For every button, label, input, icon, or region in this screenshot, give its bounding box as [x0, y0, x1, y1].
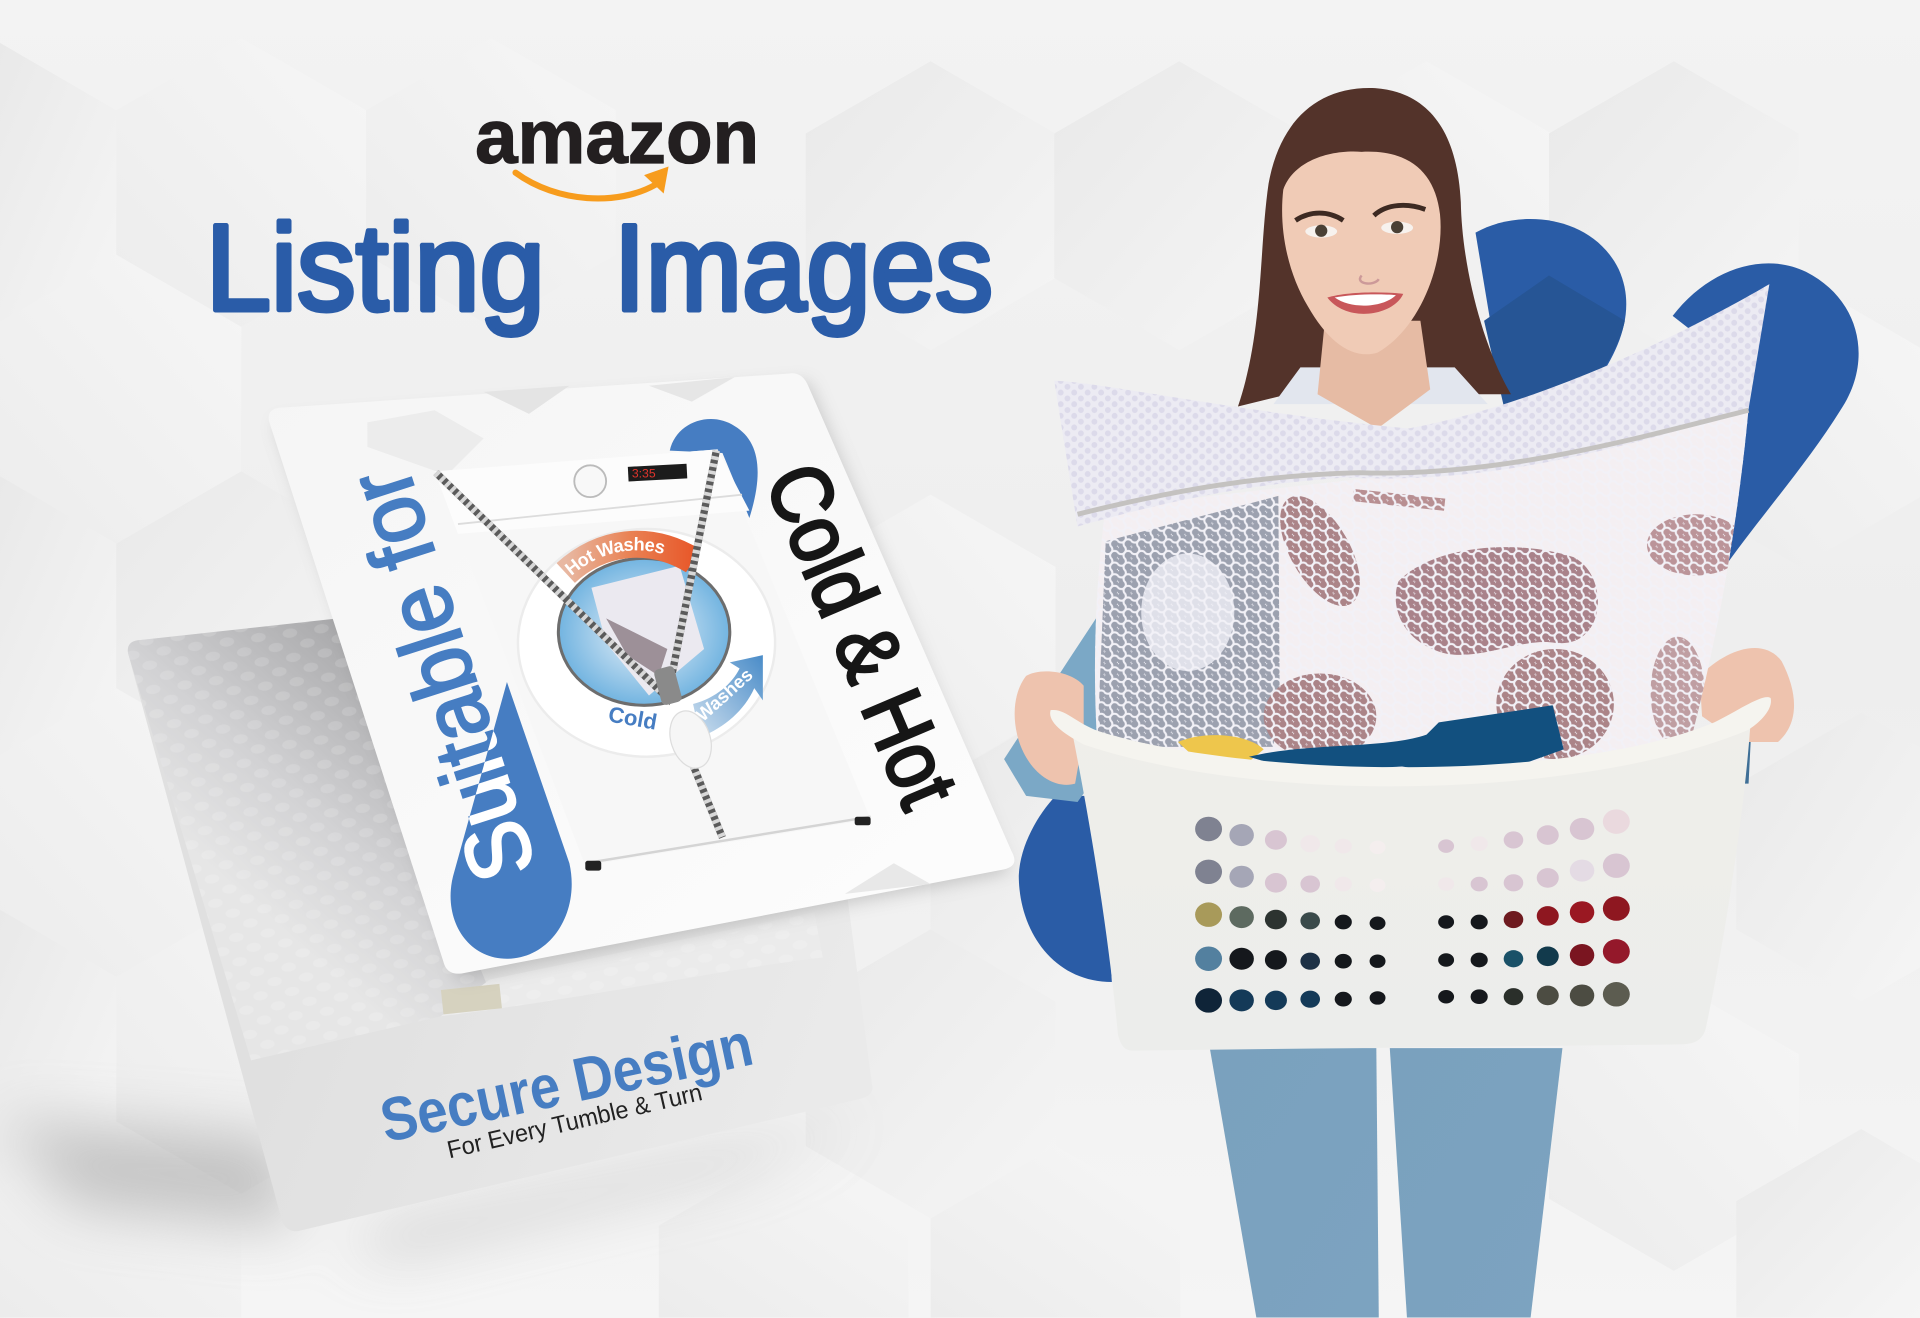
laundry basket	[1050, 697, 1771, 1051]
face	[1282, 152, 1441, 354]
woman figure	[1004, 88, 1794, 1318]
hair	[1238, 88, 1511, 407]
subheading: For Every Tumble & Turn	[445, 1079, 705, 1164]
title: Listing Images: Listing	[206, 199, 545, 336]
amazon logo: amazon	[475, 95, 759, 180]
Suitable for heading	[360, 476, 532, 878]
laundry bag in drum	[591, 566, 704, 695]
basket rim	[1050, 697, 1771, 786]
basket holes lower rows	[1195, 896, 1630, 1013]
sleeves and torso	[1004, 600, 1751, 802]
washes arrow: Washes	[691, 664, 757, 725]
cold label: Cold	[606, 702, 659, 735]
laundry in basket	[1178, 705, 1564, 779]
Suitable for heading: Suitable for	[329, 457, 555, 893]
Cold and Hot heading: Cold & Hot	[747, 450, 977, 821]
smile	[1327, 292, 1403, 314]
door ring	[518, 529, 775, 757]
jeans	[1210, 1048, 1562, 1318]
Secure Design heading: Secure Design	[374, 1010, 759, 1155]
zipper	[436, 451, 722, 838]
front card shadow	[276, 382, 1010, 980]
Suitable for heading: Suitable for	[329, 457, 555, 893]
bag zipper	[1078, 410, 1749, 514]
washing machine	[433, 449, 871, 871]
back card: secure design	[128, 575, 872, 1231]
basket holes upper rows	[1195, 809, 1630, 893]
mesh fabric panel	[128, 618, 823, 1060]
neck and shirt	[1273, 321, 1488, 429]
laundry mesh bag	[1054, 284, 1769, 771]
title: Listing Images: Images	[613, 199, 993, 336]
blue drop top right	[670, 419, 758, 518]
feet	[585, 861, 601, 871]
hot washes arc: Hot Washes	[564, 537, 664, 576]
yellow cloth	[1178, 735, 1264, 762]
clothes seen through mesh	[1097, 483, 1745, 759]
washing machine: 3:35	[632, 467, 656, 481]
hot washes arc	[556, 530, 694, 583]
blue background blobs	[1019, 219, 1859, 982]
title: Listing Images	[206, 199, 993, 336]
blue drop bottom left	[451, 682, 572, 959]
zipper tag	[441, 984, 502, 1014]
zipper pull	[653, 665, 718, 774]
control dial	[574, 465, 606, 497]
bag flap	[1054, 284, 1769, 527]
ground shadow	[0, 1120, 857, 1254]
front card: cold and hot washes	[269, 374, 1014, 974]
bag body	[1095, 409, 1749, 771]
drum	[558, 558, 730, 705]
washes arrow	[691, 655, 763, 737]
left hand	[1015, 671, 1084, 785]
right hand	[1700, 648, 1794, 742]
display	[628, 464, 687, 482]
navy cloth	[1249, 705, 1564, 779]
